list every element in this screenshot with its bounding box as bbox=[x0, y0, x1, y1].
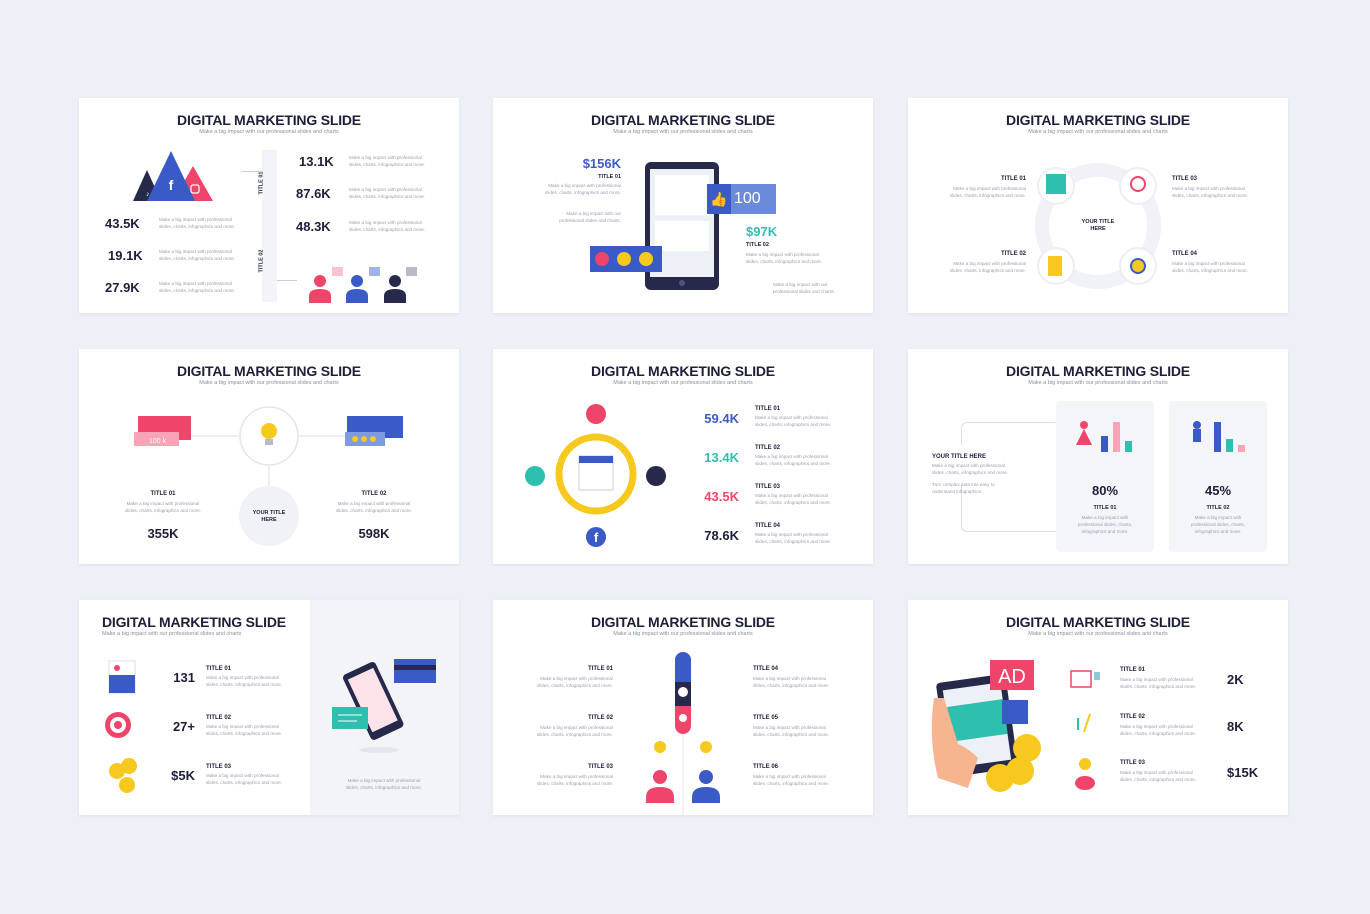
slide 2: phone with facebook stats bbox=[493, 98, 873, 313]
title: DIGITAL MARKETING SLIDE bbox=[102, 614, 286, 630]
stat $97K: professional slides and charts. bbox=[773, 289, 835, 294]
text: title 03: slides, charts, infographics and more. bbox=[1172, 193, 1248, 198]
outline box bbox=[961, 422, 1061, 532]
stats list: Make a big impact with professional bbox=[1120, 724, 1193, 729]
stats list: slides, charts, infographics and more. bbox=[1120, 684, 1196, 689]
title: DIGITAL MARKETING SLIDE bbox=[177, 363, 361, 379]
text: title 01: TITLE 01 bbox=[150, 491, 176, 497]
text: title 02 bbox=[950, 250, 1026, 273]
text: title 02: slides, charts, infographics and more. bbox=[950, 268, 1026, 273]
list items: $5K bbox=[171, 768, 195, 783]
stats list: Make a big impact with professional bbox=[755, 454, 828, 459]
list items: Make a big impact with professional bbox=[206, 773, 279, 778]
stats list bbox=[1120, 666, 1258, 782]
list items: Make a big impact with professional bbox=[206, 675, 279, 680]
icon: like 100 bbox=[707, 184, 776, 214]
stats list: TITLE 02 bbox=[755, 445, 780, 451]
text: title 04 bbox=[1172, 250, 1248, 273]
left titles: slides, charts, infographics and more. bbox=[537, 683, 613, 688]
left titles: Make a big impact with professional bbox=[540, 725, 613, 730]
left titles: TITLE 02 bbox=[588, 715, 613, 721]
icon: calendar ring with social icons: f bbox=[594, 530, 599, 545]
right stats: Make a big impact with professional bbox=[349, 155, 422, 160]
stats list: slides, charts, infographics and more. bbox=[755, 539, 831, 544]
slide 6: percentage cards bbox=[908, 349, 1288, 564]
left stats: 27.9K bbox=[105, 280, 140, 295]
stats list: Make a big impact with professional bbox=[755, 493, 828, 498]
stats list: TITLE 02 bbox=[1120, 714, 1145, 720]
text: title 01 bbox=[125, 490, 201, 541]
slide 3: circular four titles bbox=[908, 98, 1288, 313]
card 02: infographics and more. bbox=[1195, 529, 1241, 534]
left stats: slides, charts, infographics and more. bbox=[159, 224, 235, 229]
text: title 01: Make a big impact with professional bbox=[953, 186, 1026, 191]
diagram: connector lines and circles: 100 k bbox=[149, 438, 167, 445]
card 01: TITLE 01 bbox=[1094, 505, 1116, 511]
text: title 03 bbox=[1172, 176, 1248, 198]
text: title 02 bbox=[336, 490, 412, 541]
text: title 04: TITLE 04 bbox=[1172, 251, 1197, 257]
text: your title here bbox=[932, 454, 1008, 494]
left stats bbox=[105, 216, 235, 295]
stats list: TITLE 01 bbox=[755, 406, 780, 412]
title: DIGITAL MARKETING SLIDE bbox=[1006, 614, 1190, 630]
text: title 02: Make a big impact with professional bbox=[338, 501, 410, 506]
left stats: Make a big impact with professional bbox=[159, 217, 232, 222]
stat $156K: professional slides and charts. bbox=[559, 218, 621, 223]
stats list: slides, charts, infographics and more. bbox=[755, 422, 831, 427]
stats list: 43.5K bbox=[704, 489, 739, 504]
icon: social triangles: ♪ bbox=[146, 191, 150, 198]
diagram: connector lines and circles: YOUR TITLE bbox=[253, 510, 286, 516]
subtitle: Make a big impact with our professional slides and charts bbox=[613, 380, 753, 386]
stat $97K: TITLE 02 bbox=[746, 242, 769, 248]
slide 7: left list with phone panel bbox=[79, 600, 459, 815]
stats list: 8K bbox=[1227, 719, 1244, 734]
list items: TITLE 01 bbox=[206, 666, 231, 672]
left titles: slides, charts, infographics and more. bbox=[537, 732, 613, 737]
left titles: TITLE 03 bbox=[588, 764, 613, 770]
right panel background bbox=[310, 600, 459, 815]
stats list: Make a big impact with professional bbox=[755, 415, 828, 420]
vertical title bar bbox=[262, 150, 277, 302]
subtitle: Make a big impact with our professional slides and charts bbox=[199, 380, 339, 386]
icon: hand holding phone with AD: AD bbox=[998, 666, 1026, 688]
stats list: 13.4K bbox=[704, 450, 739, 465]
card 02: Make a big impact with bbox=[1195, 515, 1241, 520]
caption bbox=[346, 778, 422, 790]
slide 5: calendar ring with social stats bbox=[493, 349, 873, 564]
caption: slides, charts, infographics and more. bbox=[346, 785, 422, 790]
left stats: 43.5K bbox=[105, 216, 140, 231]
right stats: 48.3K bbox=[296, 219, 331, 234]
left titles: Make a big impact with professional bbox=[540, 774, 613, 779]
icon: hand holding phone with AD bbox=[932, 660, 1041, 792]
icon: phone bbox=[645, 162, 719, 290]
title: DIGITAL MARKETING SLIDE bbox=[591, 112, 775, 128]
left stats: slides, charts, infographics and more. bbox=[159, 288, 235, 293]
right titles: Make a big impact with professional bbox=[753, 676, 826, 681]
stats list: Make a big impact with professional bbox=[755, 532, 828, 537]
stats list: TITLE 03 bbox=[755, 484, 780, 490]
subtitle: Make a big impact with our professional slides and charts bbox=[1028, 631, 1168, 637]
text: title 04: slides, charts, infographics and more. bbox=[1172, 268, 1248, 273]
slide 1: social triangles stats: TITLE 01 bbox=[258, 172, 264, 194]
stats list: slides, charts, infographics and more. bbox=[1120, 731, 1196, 736]
subtitle: Make a big impact with our professional slides and charts bbox=[102, 631, 241, 637]
centre timeline with people bbox=[646, 652, 720, 815]
card 01: Make a big impact with bbox=[1082, 515, 1128, 520]
title: DIGITAL MARKETING SLIDE bbox=[591, 614, 775, 630]
card 02: TITLE 02 bbox=[1207, 505, 1229, 511]
card 02 bbox=[1169, 401, 1267, 552]
right stats: 13.1K bbox=[299, 154, 334, 169]
right titles: TITLE 06 bbox=[753, 764, 778, 770]
stats list: $15K bbox=[1227, 765, 1258, 780]
stats list: TITLE 04 bbox=[755, 523, 780, 529]
text: title 02: Make a big impact with professional bbox=[953, 261, 1026, 266]
subtitle: Make a big impact with our professional slides and charts bbox=[199, 129, 339, 135]
right titles: slides, charts, infographics and more. bbox=[753, 683, 829, 688]
diagram: connector lines and circles bbox=[134, 406, 403, 546]
stat $156K: Make a big impact with professional bbox=[548, 183, 621, 188]
list items bbox=[171, 666, 282, 785]
icon: people with reactions bbox=[309, 267, 417, 303]
left stats: slides, charts, infographics and more. bbox=[159, 256, 235, 261]
left stats: Make a big impact with professional bbox=[159, 281, 232, 286]
card 01: professional slides, charts, bbox=[1078, 522, 1132, 527]
list items: TITLE 03 bbox=[206, 764, 231, 770]
right stats: slides, charts, infographics and more. bbox=[349, 194, 425, 199]
list items: slides, charts, infographics and more. bbox=[206, 682, 282, 687]
icon: like 100: 100 bbox=[734, 190, 761, 207]
card 01: infographics and more. bbox=[1082, 529, 1128, 534]
icon: calendar ring with social icons bbox=[525, 404, 666, 547]
text: title 02: TITLE 02 bbox=[361, 491, 386, 497]
card 01: 80% bbox=[1092, 483, 1118, 498]
text: title 01: 355K bbox=[147, 526, 179, 541]
card 02: 45% bbox=[1205, 483, 1231, 498]
title: DIGITAL MARKETING SLIDE bbox=[177, 112, 361, 128]
right stats: Make a big impact with professional bbox=[349, 220, 422, 225]
subtitle: Make a big impact with our professional slides and charts bbox=[613, 631, 753, 637]
stat $156K bbox=[545, 156, 621, 223]
left titles: Make a big impact with professional bbox=[540, 676, 613, 681]
icon: social triangles bbox=[133, 151, 213, 201]
icon: like 100: 👍 bbox=[710, 191, 728, 207]
right stats: slides, charts, infographics and more. bbox=[349, 162, 425, 167]
ring diagram bbox=[1035, 163, 1161, 289]
left stats: 19.1K bbox=[108, 248, 143, 263]
card 02: professional slides, charts, bbox=[1191, 522, 1245, 527]
subtitle: Make a big impact with our professional slides and charts bbox=[1028, 380, 1168, 386]
text: title 01: slides, charts, infographics and more. bbox=[125, 508, 201, 513]
stats list: Make a big impact with professional bbox=[1120, 770, 1193, 775]
list items: TITLE 02 bbox=[206, 715, 231, 721]
right titles: slides, charts, infographics and more. bbox=[753, 732, 829, 737]
icon: social triangles: f bbox=[169, 177, 174, 193]
slide 4: idea with two stats bbox=[79, 349, 459, 564]
slide 1: social triangles stats: TITLE 02 bbox=[258, 250, 264, 272]
stats list: TITLE 01 bbox=[1120, 667, 1145, 673]
icon: emoji reactions bbox=[590, 246, 662, 272]
ring diagram: HERE bbox=[1090, 226, 1106, 232]
slide 8: vertical social timeline bbox=[493, 600, 873, 815]
stat $156K: slides, charts, infographics and more. bbox=[545, 190, 621, 195]
right stats: 87.6K bbox=[296, 186, 331, 201]
subtitle: Make a big impact with our professional slides and charts bbox=[1028, 129, 1168, 135]
subtitle: Make a big impact with our professional slides and charts bbox=[613, 129, 753, 135]
left titles bbox=[537, 666, 613, 786]
list items: 27+ bbox=[173, 719, 195, 734]
stat $97K: slides, charts, infographics and more. bbox=[746, 259, 822, 264]
text: title 01: slides, charts, infographics and more. bbox=[950, 193, 1026, 198]
text: your title here: slides, charts, infographics and more. bbox=[932, 470, 1008, 475]
stats list bbox=[704, 406, 831, 544]
text: title 01: Make a big impact with professional bbox=[127, 501, 199, 506]
text: title 03: Make a big impact with professional bbox=[1172, 186, 1245, 191]
list items: slides, charts, infographics and more. bbox=[206, 780, 282, 785]
slide 1: social triangles stats bbox=[79, 98, 459, 313]
stat $97K: Make a big impact with professional bbox=[746, 252, 819, 257]
left titles: slides, charts, infographics and more. bbox=[537, 781, 613, 786]
text: title 04: Make a big impact with professional bbox=[1172, 261, 1245, 266]
title: DIGITAL MARKETING SLIDE bbox=[1006, 363, 1190, 379]
right stats bbox=[296, 154, 425, 234]
list items: 131 bbox=[173, 670, 195, 685]
title: DIGITAL MARKETING SLIDE bbox=[1006, 112, 1190, 128]
text: your title here: Turn complex data into easy to bbox=[932, 482, 995, 487]
right titles: TITLE 04 bbox=[753, 666, 778, 672]
icons column bbox=[105, 660, 137, 793]
right stats: slides, charts, infographics and more. bbox=[349, 227, 425, 232]
caption: Make a big impact with professional bbox=[348, 778, 420, 783]
left titles: TITLE 01 bbox=[588, 666, 613, 672]
right titles: TITLE 05 bbox=[753, 715, 778, 721]
stat $97K: $97K bbox=[746, 224, 777, 239]
right titles: Make a big impact with professional bbox=[753, 725, 826, 730]
stat $97K bbox=[746, 224, 835, 294]
text: your title here: YOUR TITLE HERE bbox=[932, 454, 986, 460]
stats list: 2K bbox=[1227, 672, 1244, 687]
text: title 01: TITLE 01 bbox=[1001, 176, 1026, 182]
text: title 02: 598K bbox=[358, 526, 390, 541]
text: title 01 bbox=[950, 176, 1026, 198]
right titles bbox=[753, 666, 829, 786]
text: your title here: Make a big impact with professional bbox=[932, 463, 1005, 468]
text: title 02: TITLE 02 bbox=[1001, 251, 1026, 257]
right titles: Make a big impact with professional bbox=[753, 774, 826, 779]
slide 9: ad phone with stats bbox=[908, 600, 1288, 815]
right titles: slides, charts, infographics and more. bbox=[753, 781, 829, 786]
stat $97K: Make a big impact with our bbox=[773, 282, 828, 287]
icons column bbox=[1070, 670, 1100, 790]
diagram: connector lines and circles: HERE bbox=[261, 517, 277, 523]
stats list: TITLE 03 bbox=[1120, 760, 1145, 766]
stats list: 59.4K bbox=[704, 411, 739, 426]
stat $156K: $156K bbox=[583, 156, 621, 171]
card 01 bbox=[1056, 401, 1154, 552]
stats list: slides, charts, infographics and more. bbox=[1120, 777, 1196, 782]
ring diagram: YOUR TITLE bbox=[1082, 219, 1115, 225]
list items: slides, charts, infographics and more. bbox=[206, 731, 282, 736]
list items: Make a big impact with professional bbox=[206, 724, 279, 729]
stat $156K: TITLE 01 bbox=[598, 174, 621, 180]
stats list: slides, charts, infographics and more. bbox=[755, 461, 831, 466]
right stats: Make a big impact with professional bbox=[349, 187, 422, 192]
text: title 03: TITLE 03 bbox=[1172, 176, 1197, 182]
stats list: 78.6K bbox=[704, 528, 739, 543]
stats list: Make a big impact with professional bbox=[1120, 677, 1193, 682]
left stats: Make a big impact with professional bbox=[159, 249, 232, 254]
icon: phone with card and chat bbox=[332, 659, 436, 753]
title: DIGITAL MARKETING SLIDE bbox=[591, 363, 775, 379]
stat $156K: Make a big impact with our bbox=[566, 211, 621, 216]
text: your title here: understand infographics. bbox=[932, 489, 982, 494]
stats list: slides, charts, infographics and more. bbox=[755, 500, 831, 505]
text: title 02: slides, charts, infographics and more. bbox=[336, 508, 412, 513]
